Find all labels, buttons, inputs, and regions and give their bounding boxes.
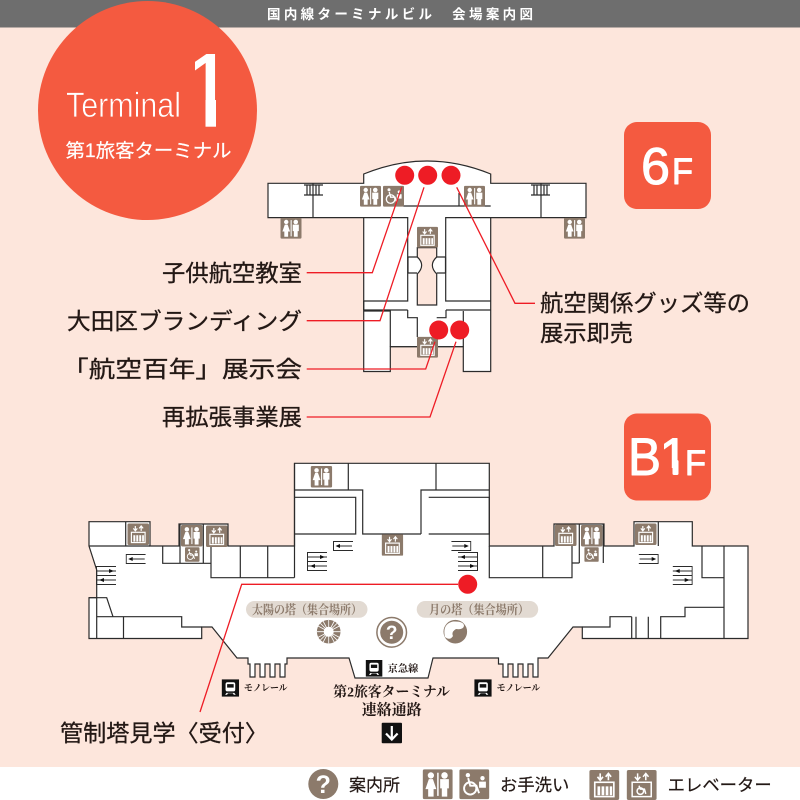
floor plan 6F (268, 161, 586, 372)
legend: information: 案内所 (349, 776, 400, 795)
callout: 航空百年展示会: 「航空百年」展示会 (62, 356, 302, 382)
meeting point: 月の塔 (417, 601, 538, 644)
icon: down arrow (382, 723, 402, 743)
callout: 航空関係グッズ等の展示即売 (442, 166, 750, 346)
header bar (0, 0, 800, 28)
callout: 大田区ブランディング (67, 166, 437, 334)
elevator icons B1F (128, 524, 656, 556)
callout: 子供航空教室 (162, 166, 414, 286)
callout: 航空関係グッズ等の展示即売: 航空関係グッズ等の (540, 290, 750, 316)
floor badge B1F: B (628, 428, 661, 487)
terminal japanese name: 第1旅客ターミナル (66, 140, 232, 162)
legend: restrooms (423, 769, 569, 799)
meeting point: 月の塔: 月の塔（集合場所） (429, 602, 529, 617)
marker and line: 管制塔見学 (200, 575, 477, 712)
escalators and stairs B1F (96, 541, 693, 585)
legend: information: ? (316, 771, 331, 799)
terminal number (195, 54, 216, 127)
floor plan B1F (89, 463, 748, 712)
central stair core 6F (417, 248, 437, 305)
meeting point: 太陽の塔: 太陽の塔（集合場所） (252, 602, 362, 617)
legend: information (308, 769, 400, 799)
stair marks 6F (304, 185, 550, 273)
legend: restrooms: お手洗い (500, 776, 569, 795)
callout: 子供航空教室: 子供航空教室 (162, 260, 302, 286)
terminal 2 connection label: 第2旅客ターミナル (333, 684, 450, 700)
inner walls B1F left (89, 463, 421, 638)
inner walls 6F (313, 183, 541, 347)
callout: 航空関係グッズ等の展示即売: 展示即売 (540, 320, 633, 346)
header bar: 国内線ターミナルビル 会場案内図 (267, 6, 533, 22)
floor badge B1F (624, 414, 711, 500)
floor badge 6F: 6 (641, 138, 670, 196)
terminal 2 connection label (333, 684, 450, 718)
inner walls B1F right (421, 463, 724, 638)
terminal 2 connection label: 連絡通路 (362, 700, 422, 718)
meeting point: 太陽の塔 (246, 601, 368, 644)
callout: 大田区ブランディング: 大田区ブランディング (67, 308, 302, 334)
callout: 航空百年展示会 (62, 320, 448, 382)
floor badge 6F (624, 122, 711, 209)
terminal number: 1 (179, 32, 238, 150)
floor badge B1F: F (685, 444, 706, 483)
building outline 6F (268, 161, 586, 372)
information icon (377, 618, 407, 647)
monorail right: モノレール (497, 683, 541, 694)
legend: elevators (589, 770, 772, 800)
monorail right (474, 679, 541, 697)
legend (0, 767, 800, 800)
keikyu line (366, 660, 418, 677)
callout: 再拡張事業展: 再拡張事業展 (162, 404, 302, 430)
information icon: ? (386, 623, 398, 644)
restroom icons B1F (181, 466, 602, 562)
building outline B1F (89, 463, 748, 678)
legend: elevators: エレベーター (668, 776, 772, 795)
floor badge B1F: 1 (659, 428, 688, 487)
restroom icons 6F (280, 186, 585, 239)
monorail left: モノレール (244, 683, 288, 694)
terminal word: Terminal (66, 86, 181, 125)
callout label: 管制塔見学: 管制塔見学〈受付〉 (60, 720, 268, 746)
monorail left (222, 679, 288, 697)
elevator icons 6F (417, 227, 438, 358)
keikyu line: 京急線 (388, 662, 418, 675)
floor badge 6F: F (672, 151, 693, 192)
callout: 再拡張事業展 (162, 320, 469, 430)
terminal badge (38, 1, 257, 220)
